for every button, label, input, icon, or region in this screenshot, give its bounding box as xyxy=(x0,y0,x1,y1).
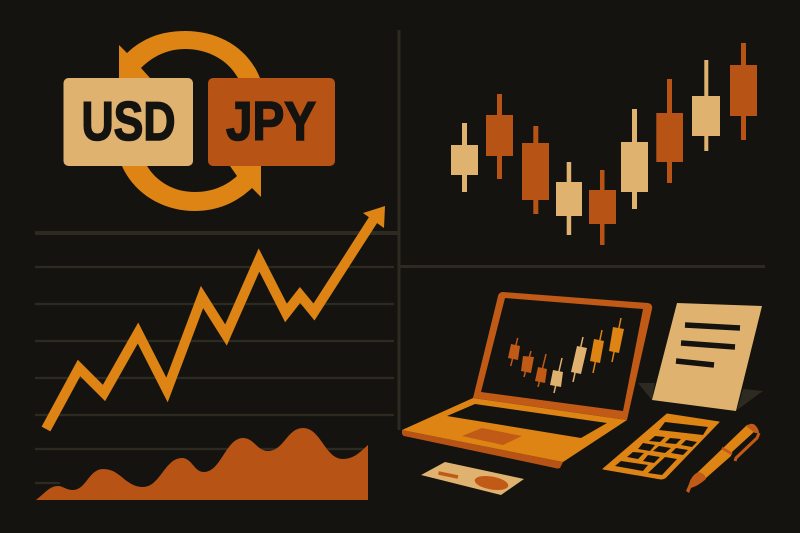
candle 9 xyxy=(730,43,757,140)
pen nib xyxy=(686,472,706,493)
laptop base xyxy=(402,398,627,462)
rising line chart with arrow xyxy=(46,206,385,429)
calculator xyxy=(603,414,719,479)
currency box: USD: USD xyxy=(82,90,176,152)
laptop screen xyxy=(473,292,652,420)
mini candlesticks on screen xyxy=(508,318,624,393)
currency box: USD xyxy=(64,78,193,166)
candle 3 xyxy=(522,126,549,214)
calculator keys xyxy=(615,436,697,475)
candle 8 xyxy=(692,60,720,151)
arrow head xyxy=(363,206,385,228)
document text lines xyxy=(676,325,740,365)
candle 5 xyxy=(589,170,616,245)
pen band xyxy=(722,448,732,454)
document xyxy=(652,303,762,411)
arrow: bottom arc pointing right xyxy=(122,166,261,211)
candle 7 xyxy=(656,79,683,183)
document shadow xyxy=(638,383,763,410)
pen xyxy=(686,424,759,493)
arrow: top arc pointing left xyxy=(119,31,260,78)
pen cap xyxy=(746,424,759,433)
laptop xyxy=(402,292,652,468)
candle 6 xyxy=(621,109,648,209)
currency box: JPY: JPY xyxy=(226,90,316,152)
exchange arrows: circular USD to JPY xyxy=(119,31,261,211)
currency box: JPY xyxy=(208,78,335,166)
pen body xyxy=(692,424,755,487)
banknote xyxy=(421,462,524,495)
area chart xyxy=(36,428,368,500)
laptop front edge xyxy=(402,430,563,468)
laptop keyboard xyxy=(447,404,607,438)
candle 1 xyxy=(451,123,478,192)
pen clip xyxy=(735,433,759,461)
candle 4 xyxy=(556,162,582,235)
calculator display xyxy=(659,422,708,435)
laptop trackpad xyxy=(462,428,522,445)
candle 2 xyxy=(486,94,513,179)
candlestick chart xyxy=(451,43,757,245)
